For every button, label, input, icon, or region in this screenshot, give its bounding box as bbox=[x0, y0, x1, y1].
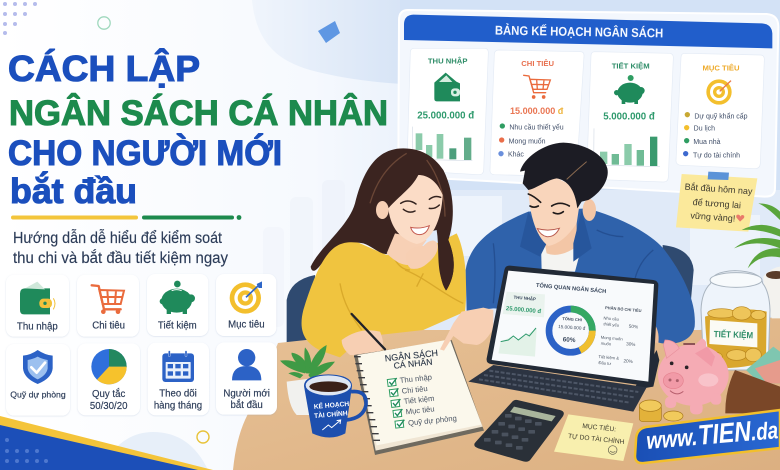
tee bbox=[541, 243, 582, 272]
board card: mục tiêu: Dự quỹ khẩn cấp bbox=[694, 111, 748, 120]
sticky note: mục tiêu: TỰ DO TÀI CHÍNH bbox=[568, 431, 625, 446]
face bbox=[528, 173, 582, 246]
collar bbox=[520, 210, 592, 262]
face bbox=[388, 175, 443, 244]
hair bbox=[520, 143, 608, 208]
income box: 25.000.000 đ bbox=[506, 306, 542, 315]
right hair strand bbox=[439, 240, 454, 291]
plant bbox=[280, 345, 335, 415]
notebook: Mục tiêu bbox=[405, 404, 435, 416]
sticky note: bắt đầu hôm nay: vững vàng! bbox=[690, 210, 736, 224]
smile bbox=[411, 226, 429, 235]
card: chi tiêu bbox=[77, 275, 139, 337]
board card: mục tiêu bbox=[676, 53, 764, 169]
title: NGÂN SÁCH CÁ NHÂN bbox=[9, 93, 388, 133]
woman's writing hand bbox=[342, 330, 383, 355]
subtitle bbox=[13, 230, 228, 267]
hand on chin bbox=[406, 241, 438, 269]
board card: chi tiêu: Khác bbox=[508, 152, 524, 159]
board card: chi tiêu: 15.000.000 đ bbox=[510, 106, 564, 116]
card: quy tắc 50/30/20 bbox=[78, 343, 140, 415]
title: bắt đầu bbox=[10, 171, 137, 211]
man bbox=[466, 143, 695, 344]
donut chart bbox=[549, 309, 592, 352]
website badge: www. bbox=[645, 424, 698, 455]
smile bbox=[537, 228, 559, 237]
website badge bbox=[635, 410, 780, 463]
card: mục tiêu bbox=[216, 274, 276, 336]
decorative dots and shapes bbox=[3, 2, 340, 43]
icon cards grid bbox=[6, 274, 277, 416]
card: thu nhập bbox=[6, 275, 69, 337]
board card: mục tiêu: Du lịch bbox=[694, 126, 715, 133]
calculator bbox=[474, 400, 564, 462]
banknotes bbox=[746, 347, 780, 383]
card: người mới bắt đầu bbox=[216, 342, 277, 415]
card: quỹ dự phòng: Quỹ dự phòng bbox=[10, 389, 66, 399]
expense allocation: muốn bbox=[601, 341, 612, 347]
hair bbox=[311, 148, 454, 290]
donut labels: TỔNG CHI bbox=[562, 316, 582, 322]
donut labels bbox=[558, 316, 586, 344]
subtitle: thu chi và bắt đầu tiết kiệm ngay bbox=[13, 250, 228, 267]
title: CÁCH LẬP bbox=[8, 47, 200, 89]
gold coins bbox=[639, 400, 683, 422]
expense allocation: PHÂN BỔ CHI TIÊU bbox=[605, 305, 642, 313]
man's pointing hand bbox=[440, 308, 493, 351]
brown wallet bbox=[725, 370, 780, 413]
notebook bbox=[354, 339, 484, 455]
website badge: TIEN bbox=[697, 415, 753, 451]
donut labels: 60% bbox=[563, 336, 576, 344]
card: theo dõi hàng tháng bbox=[148, 343, 209, 415]
sticky note: mục tiêu bbox=[554, 414, 633, 461]
mug: KẾ HOẠCH bbox=[313, 398, 350, 411]
sticky note: bắt đầu hôm nay bbox=[676, 172, 757, 232]
board card: chi tiêu bbox=[490, 50, 584, 177]
notebook: Chi tiêu bbox=[401, 384, 428, 396]
board card: chi tiêu: Mong muốn bbox=[509, 136, 546, 145]
card: tiết kiệm bbox=[147, 274, 208, 336]
card: theo dõi hàng tháng: Theo dõi bbox=[159, 389, 197, 400]
donut labels: 15.000.000 đ bbox=[558, 324, 586, 331]
card: chi tiêu: Chi tiêu bbox=[92, 320, 125, 331]
table bbox=[233, 316, 780, 470]
ear bbox=[376, 201, 389, 219]
board card: chi tiêu: Nhu cầu thiết yếu bbox=[509, 122, 564, 131]
sticky note: mục tiêu: MỤC TIÊU: bbox=[582, 421, 617, 433]
table items bbox=[280, 266, 659, 462]
expense allocation: Mong muốn bbox=[601, 335, 624, 342]
sticky note: bắt đầu hôm nay: Bắt đầu hôm nay bbox=[684, 182, 753, 196]
board card: thu nhập: 25.000.000 đ bbox=[417, 111, 474, 122]
card: tiết kiệm: Tiết kiệm bbox=[158, 320, 197, 331]
board card: tiết kiệm bbox=[587, 52, 673, 182]
notebook: CÁ NHÂN bbox=[393, 357, 433, 371]
savings jar bbox=[701, 271, 770, 370]
card: quy tắc 50/30/20: 50/30/20 bbox=[90, 401, 127, 412]
expense allocation: 20% bbox=[623, 358, 633, 364]
card: theo dõi hàng tháng: hàng tháng bbox=[154, 401, 202, 412]
board card: mục tiêu: MỤC TIÊU bbox=[702, 63, 740, 72]
card: người mới bắt đầu: Người mới bbox=[223, 388, 270, 399]
expense allocation: Đầu tư bbox=[598, 360, 612, 366]
subtitle: Hướng dẫn dễ hiểu để kiểm soát bbox=[13, 230, 223, 247]
notebook: Tiết kiệm bbox=[403, 394, 435, 406]
jar label: TIẾT KIỆM bbox=[714, 328, 753, 340]
pen bbox=[352, 314, 385, 349]
bottom left wave bbox=[0, 416, 213, 470]
card: quỹ dự phòng bbox=[6, 344, 70, 416]
card: quy tắc 50/30/20: Quy tắc bbox=[92, 389, 125, 400]
board card: tiết kiệm: 5.000.000 đ bbox=[603, 112, 655, 123]
icon: heart bbox=[736, 215, 744, 222]
card: người mới bắt đầu: bắt đầu bbox=[231, 400, 263, 411]
neck bbox=[387, 233, 427, 265]
shirt bbox=[466, 208, 695, 344]
mug: TÀI CHÍNH bbox=[314, 408, 348, 420]
title: CHO NGƯỜI MỚI bbox=[8, 133, 282, 173]
neck bbox=[543, 223, 577, 255]
budget board panel bbox=[398, 10, 778, 197]
ear bbox=[583, 199, 596, 221]
title bbox=[8, 47, 388, 211]
mug bbox=[304, 374, 366, 437]
income box: THU NHẬP bbox=[513, 295, 536, 302]
board card: thu nhập: THU NHẬP bbox=[428, 57, 467, 66]
tablet bbox=[487, 266, 658, 386]
eyes bbox=[528, 194, 569, 214]
card: mục tiêu: Mục tiêu bbox=[228, 320, 265, 331]
board header bbox=[404, 15, 772, 48]
tablet title: TỔNG QUAN NGÂN SÁCH bbox=[536, 282, 606, 295]
notebook: NGÂN SÁCH bbox=[384, 348, 438, 363]
chairs bbox=[287, 245, 694, 347]
title underline bbox=[11, 215, 241, 220]
expense allocation: Tiết kiệm & bbox=[598, 354, 619, 361]
board header: BẢNG KẾ HOẠCH NGÂN SÁCH bbox=[495, 23, 663, 40]
sticky note: bắt đầu hôm nay: để tương lai bbox=[692, 197, 741, 210]
card: thu nhập: Thu nhập bbox=[17, 321, 58, 332]
expense allocation: Nhu cầu bbox=[603, 315, 620, 322]
hand behind tablet bbox=[653, 322, 659, 343]
notebook: Quỹ dự phòng bbox=[408, 414, 457, 428]
expense allocation: 50% bbox=[629, 324, 638, 329]
eyes bbox=[401, 197, 441, 212]
income box bbox=[503, 292, 545, 317]
line chart bbox=[498, 328, 537, 357]
right plant bbox=[734, 203, 780, 318]
expense allocation: 30% bbox=[626, 341, 636, 347]
board card: tiết kiệm: TIẾT KIỆM bbox=[612, 60, 650, 70]
right side props bbox=[639, 203, 780, 422]
keyboard bbox=[468, 365, 647, 412]
tablet stand bbox=[633, 350, 659, 390]
piggy bank bbox=[658, 338, 729, 414]
board card: mục tiêu: Mua nhà bbox=[693, 139, 721, 146]
woman bbox=[302, 148, 466, 357]
notebook: Thu nhập bbox=[399, 373, 432, 385]
expense allocation: thiết yếu bbox=[603, 321, 620, 328]
board card: chi tiêu: CHI TIÊU bbox=[521, 59, 555, 68]
board card: mục tiêu: Tự do tài chính bbox=[693, 153, 740, 160]
expense allocation bbox=[598, 305, 642, 366]
sweater bbox=[302, 233, 466, 357]
board card: thu nhập bbox=[407, 48, 488, 175]
